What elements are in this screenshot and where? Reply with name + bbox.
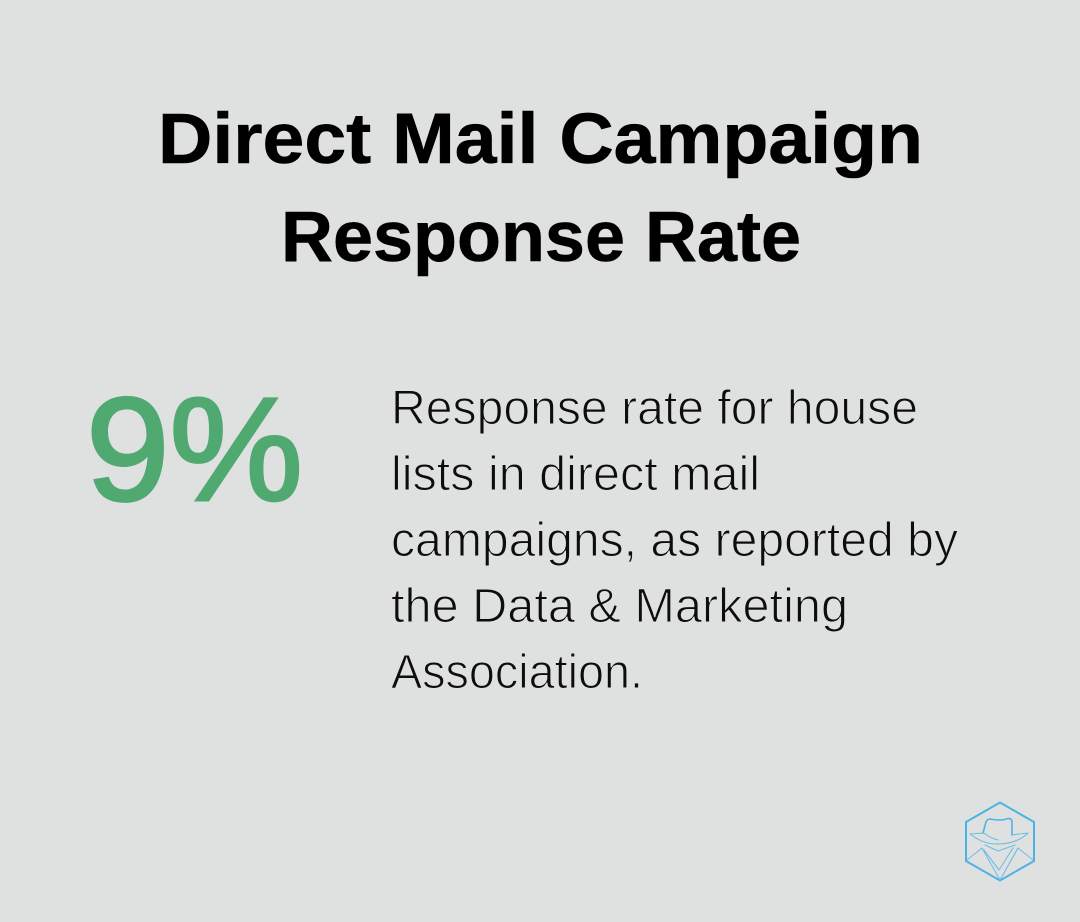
icon: hexagon outline [966,802,1034,880]
description text: the Data & Marketing [391,580,848,633]
icon: hexagon logo with hat-wearing spy [966,802,1034,880]
description text: Response rate for house [391,382,918,435]
icon: coat lapels [967,845,1033,880]
title: Response Rate [281,198,801,277]
description text [391,382,958,699]
icon: hat brim [970,833,1028,844]
title: Direct Mail Campaign [158,100,923,179]
icon: hat [983,818,1012,835]
description text: lists in direct mail [391,448,760,501]
big statistic: 9%: 9% [86,368,303,532]
title [158,100,923,277]
description text: campaigns, as reported by [391,514,958,567]
description text: Association. [391,646,643,699]
